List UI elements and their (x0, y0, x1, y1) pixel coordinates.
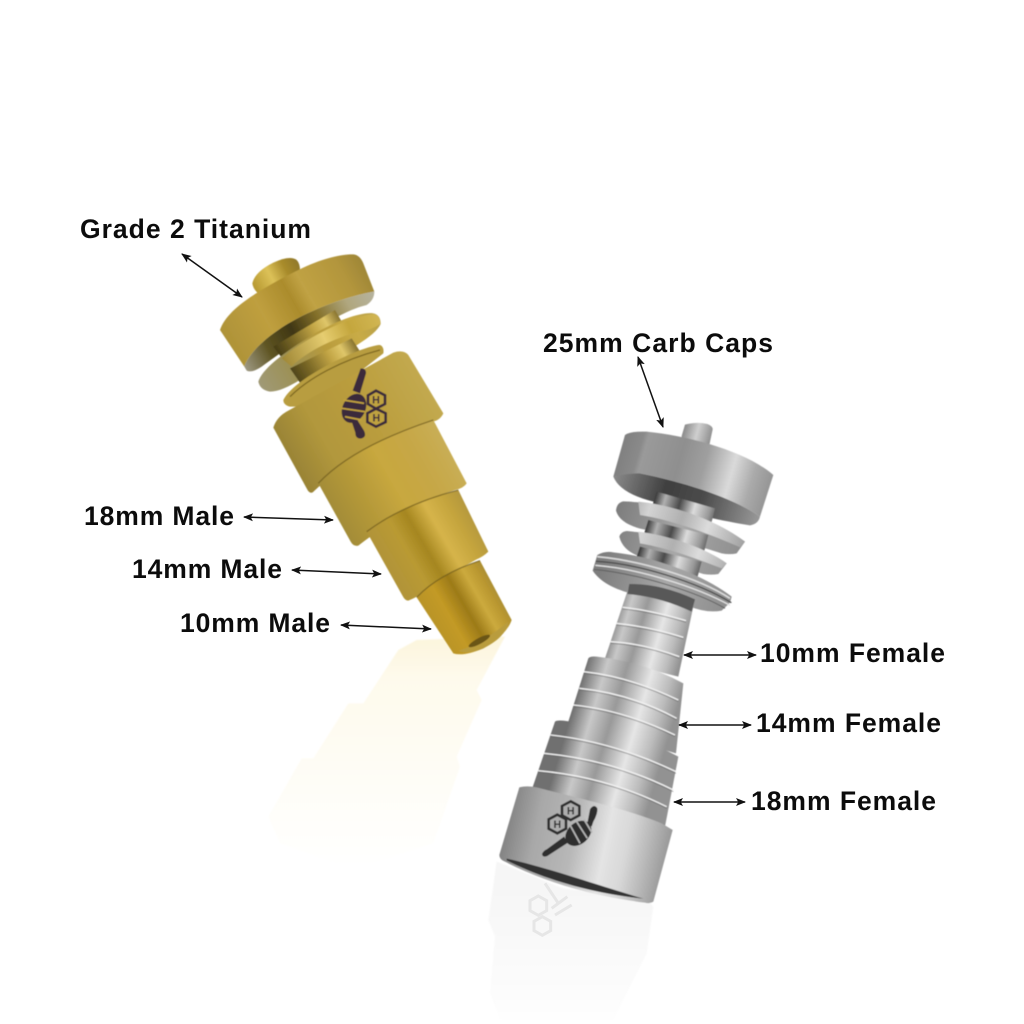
gold flange (283, 345, 384, 407)
silver cap wall (613, 432, 773, 517)
gold section four (10mm tip) (417, 561, 512, 654)
silver threaded flange (593, 552, 732, 611)
silver middle neck (640, 520, 708, 562)
silver lower body (532, 584, 695, 827)
gold section two (18mm) (318, 420, 467, 546)
silver section 14mm (568, 657, 683, 753)
arrow: 10mm Female (684, 654, 756, 656)
icon: dipper logo gold: H (372, 413, 380, 425)
label: 25mm Carb Caps: 25mm Carb Caps (543, 328, 773, 358)
arrow: 25mm Carb Caps (638, 357, 663, 427)
silver section 10mm (605, 584, 695, 677)
gold lower neck (290, 338, 363, 390)
arrow: 10mm Male (341, 625, 431, 629)
arrow: 14mm Male (292, 570, 381, 574)
gold cap wall (220, 254, 374, 367)
arrow: 18mm Female (674, 801, 745, 803)
icon: dipper logo silver: H (553, 819, 561, 831)
icon: dipper logo gold (337, 368, 386, 439)
reflection logo (530, 883, 572, 935)
gold section one with logo (273, 351, 443, 493)
arrow: 18mm Male (244, 517, 333, 520)
gold carb pin (252, 258, 300, 295)
gold tip end with hole (458, 622, 508, 652)
silver cap underside (613, 473, 760, 525)
label: 10mm Male: 10mm Male (180, 608, 330, 638)
label: Grade 2 Titanium: Grade 2 Titanium (80, 214, 311, 244)
silver disc one (616, 501, 745, 554)
reflection: silver nail (488, 862, 653, 1020)
reflection: gold nail (268, 637, 505, 870)
label: 18mm Male: 18mm Male (84, 501, 234, 531)
label: 10mm Female: 10mm Female (760, 638, 945, 668)
label: 14mm Male: 14mm Male (132, 554, 282, 584)
base opening (507, 859, 643, 899)
gold top assembly (220, 254, 384, 407)
silver carb pin (682, 423, 713, 445)
silver top assembly (593, 423, 773, 611)
silver lower neck (635, 547, 702, 580)
gold cap underside (244, 292, 374, 371)
gold upper neck (273, 310, 353, 375)
silver upper neck (648, 492, 715, 535)
label: 14mm Female: 14mm Female (756, 708, 941, 738)
gold section three (14mm) (367, 490, 488, 601)
silver section 18mm (532, 720, 678, 827)
silver base with logo (499, 786, 673, 903)
silver titanium nail (499, 423, 773, 903)
label: 18mm Female: 18mm Female (751, 786, 936, 816)
icon: dipper logo silver (542, 801, 597, 857)
silver disc two (619, 531, 727, 575)
gold disc A (258, 313, 381, 392)
arrow: 14mm Female (679, 724, 751, 726)
arrow: Grade 2 Titanium (182, 254, 242, 297)
icon: dipper logo silver: H (567, 806, 575, 818)
icon: dipper logo gold: H (372, 395, 380, 407)
gold lower body (273, 351, 512, 654)
gold titanium nail (220, 254, 512, 654)
